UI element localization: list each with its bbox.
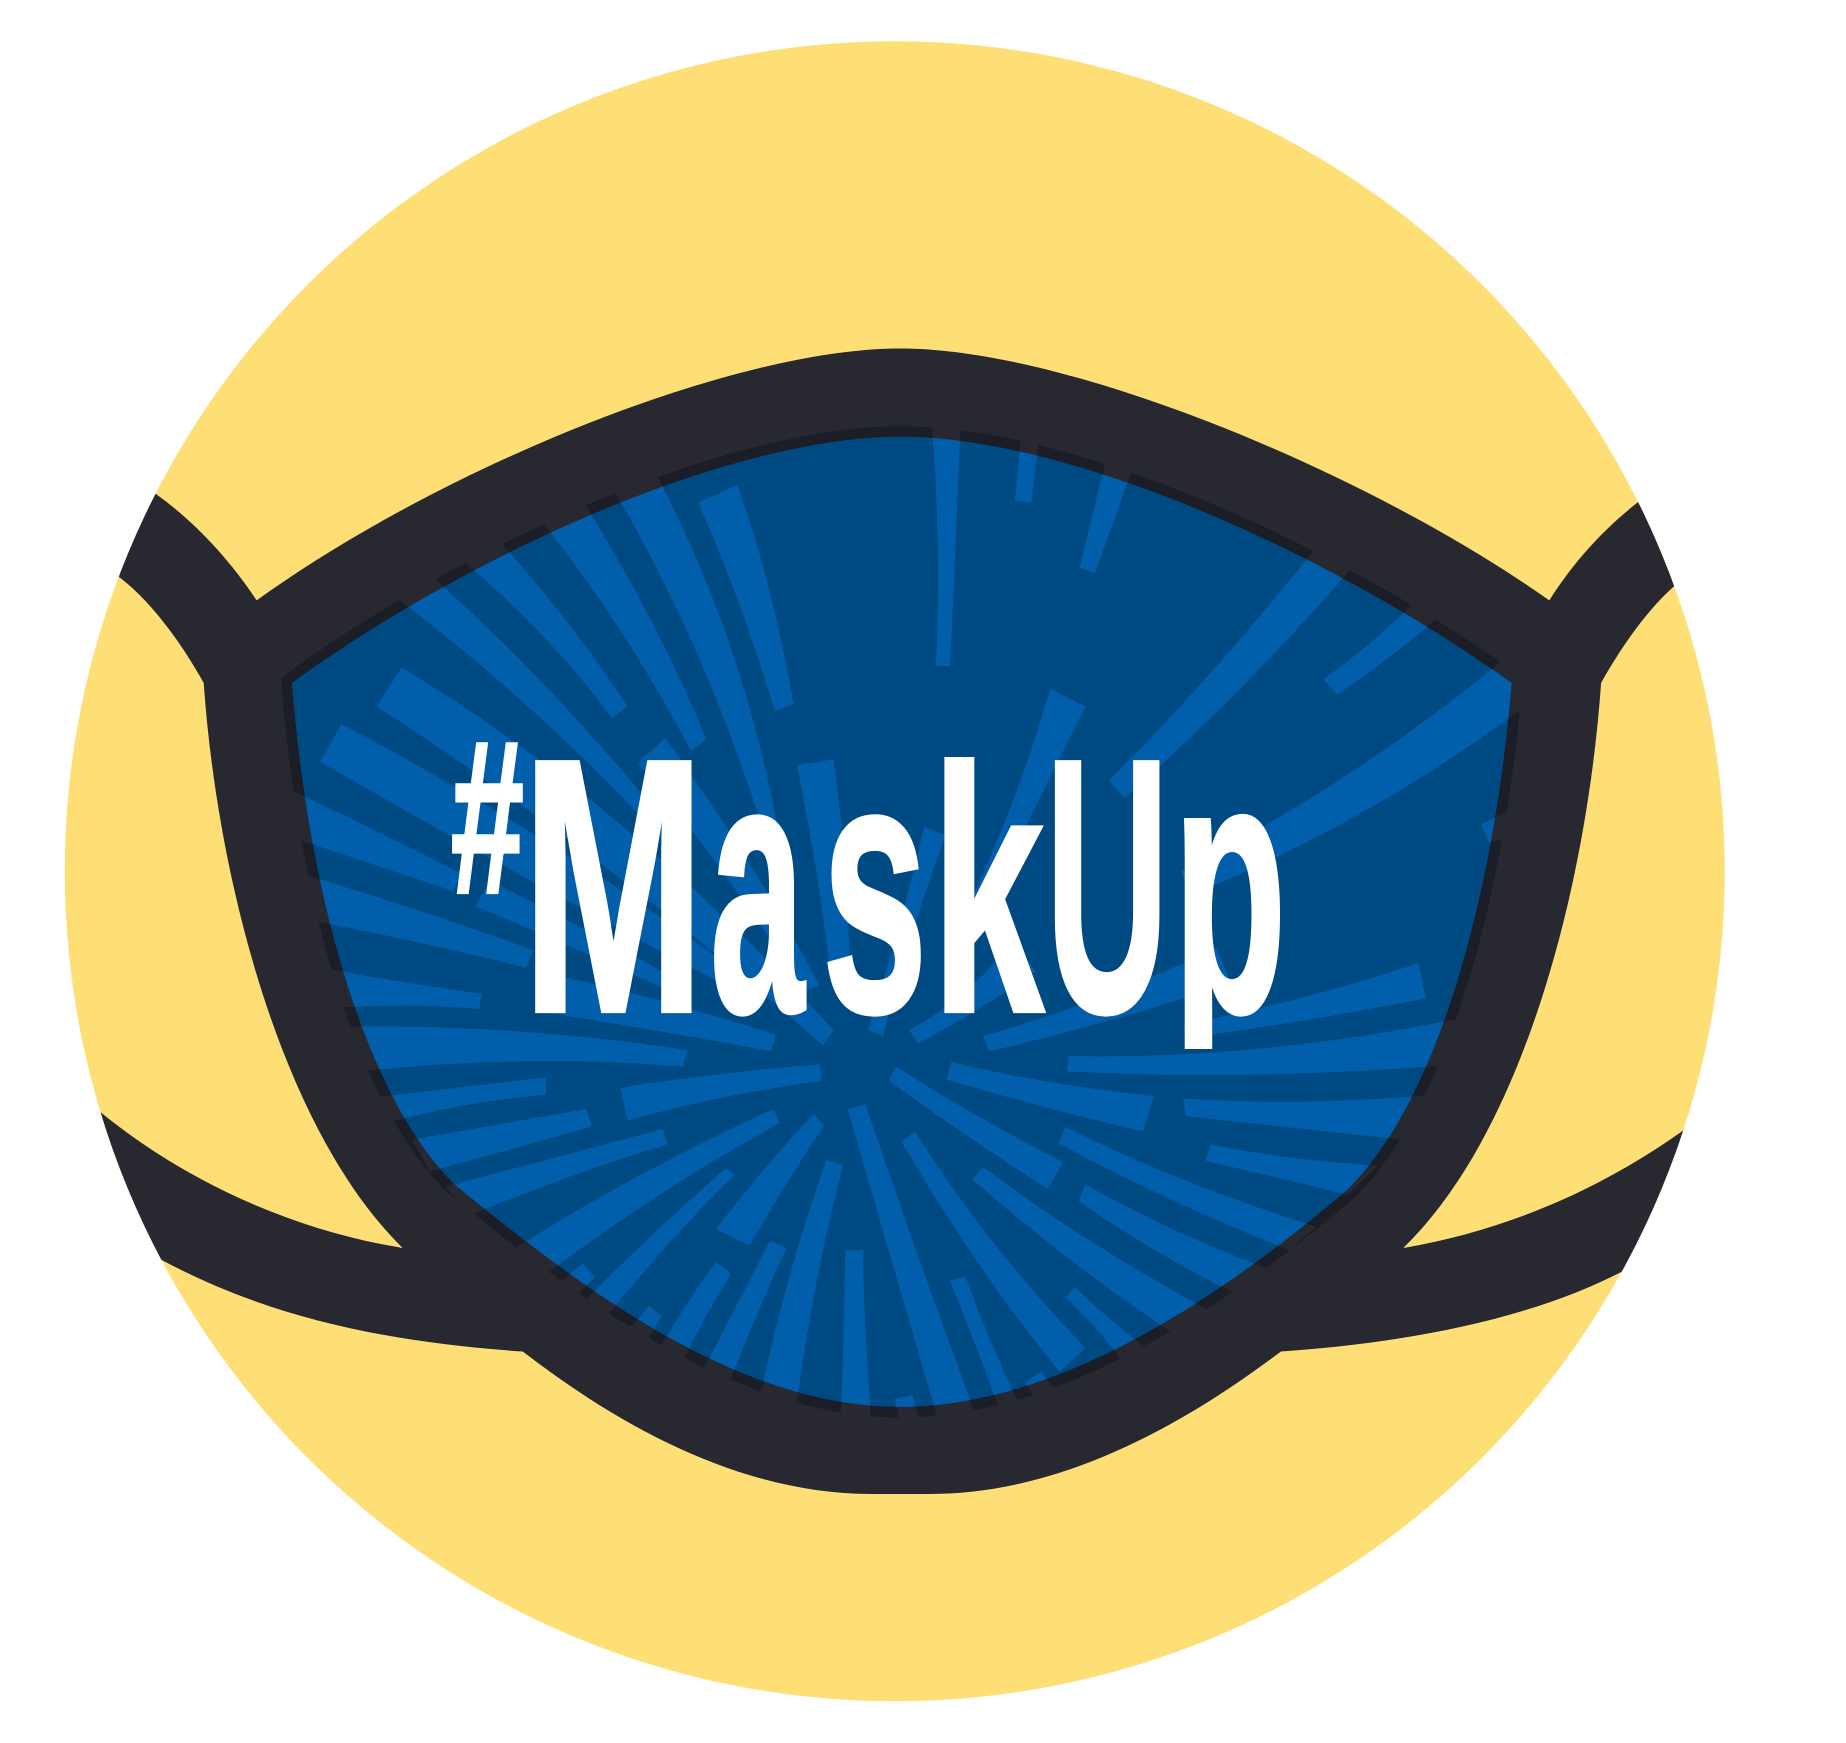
mask fabric panel — [292, 437, 1512, 1407]
starburst rays on fabric — [283, 418, 1536, 1425]
mask body with ear straps — [71, 348, 1719, 1494]
title: #MaskUp — [452, 742, 1280, 1049]
stitching shadow band — [292, 437, 1512, 1407]
title: #MaskUp: M — [522, 682, 705, 1088]
gaps in stitching band — [283, 418, 1536, 1425]
title: #MaskUp: # — [451, 696, 524, 939]
title: #MaskUp: U — [1045, 682, 1169, 1088]
title: #MaskUp: a — [710, 682, 806, 1088]
title: #MaskUp: k — [931, 698, 1046, 1086]
title: #MaskUp: p — [1173, 682, 1287, 1091]
title: #MaskUp: s — [822, 682, 928, 1088]
